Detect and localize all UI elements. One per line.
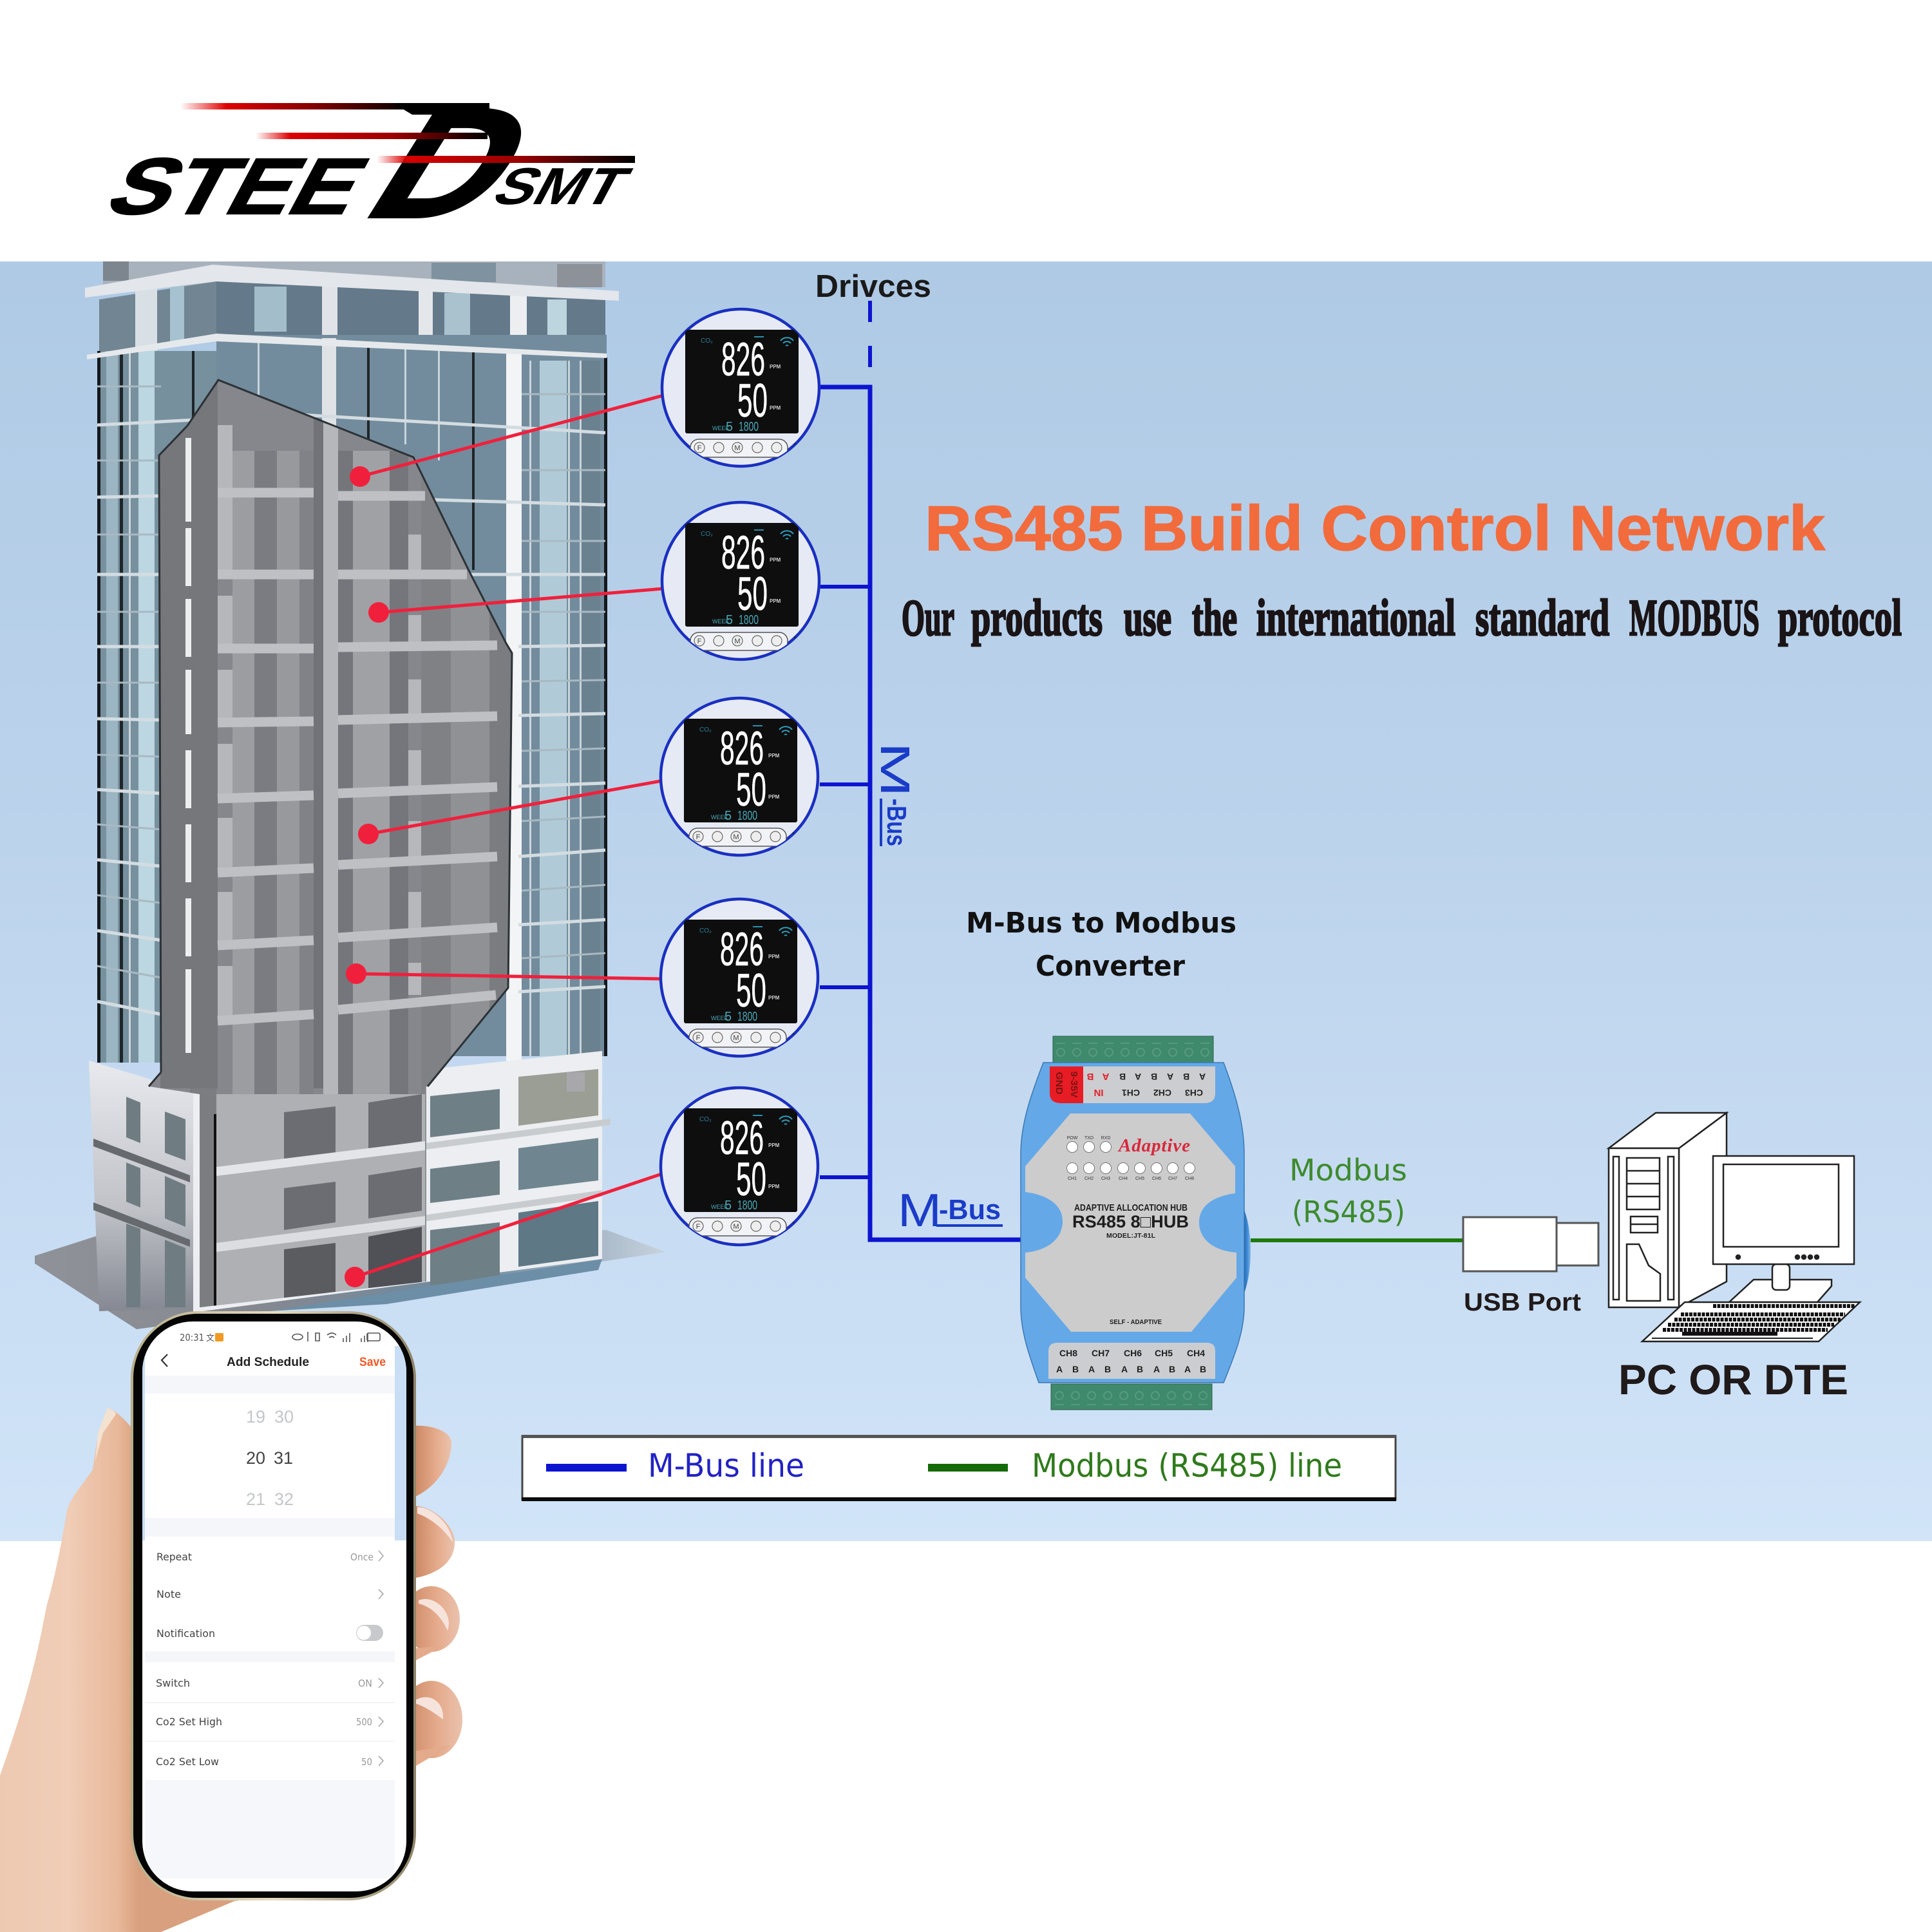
hub top label panel: IN [1094, 1087, 1104, 1098]
device 2: WEEK [712, 618, 730, 625]
hub top label panel: A [1167, 1072, 1173, 1082]
device 2: 1800 [739, 613, 759, 627]
phone settings rows: Switch [156, 1677, 190, 1689]
ground plate [35, 1230, 666, 1329]
penthouse glass floor [99, 281, 605, 355]
device 1: PPM [770, 364, 781, 370]
logo: STEED SMT: D [337, 76, 570, 251]
label: Modbus (RS485) [1289, 1153, 1407, 1229]
device 2 [662, 502, 819, 659]
hub product text: SELF - ADAPTIVE [1110, 1318, 1162, 1326]
hub top label panel: CH2 [1153, 1088, 1171, 1098]
logo: STEED SMT [93, 76, 639, 251]
hub bottom label panel: A [1088, 1364, 1095, 1374]
device 4: 826 [720, 923, 764, 976]
subtitle [902, 590, 1902, 647]
finger 4 [401, 1681, 462, 1758]
device 4: CO₂ [699, 927, 712, 934]
phone settings rows: ON [358, 1678, 372, 1689]
device 3: F [696, 833, 701, 841]
hub bottom label panel: CH4 [1187, 1348, 1205, 1358]
device 3: PPM [768, 753, 780, 759]
label: converter heading [966, 907, 1236, 983]
subtitle: Our [902, 590, 954, 647]
device 3: CO₂ [699, 726, 712, 734]
device 1: 50 [737, 375, 768, 427]
phone settings rows: Co2 Set High [156, 1716, 222, 1728]
hub LEDs [1066, 1141, 1195, 1173]
device 3: M [733, 833, 739, 841]
monitor [1713, 1156, 1854, 1264]
hub bottom label panel: CH6 [1124, 1348, 1142, 1358]
device 5: M [733, 1223, 739, 1231]
label: converter heading: M-Bus to Modbus [966, 907, 1236, 940]
phone time picker: 20 [246, 1448, 265, 1468]
Modbus green wire [1251, 1238, 1463, 1242]
device 5: WEEK [711, 1204, 728, 1210]
monitor stand [1729, 1264, 1832, 1302]
device 2: PPM [770, 557, 781, 563]
finger 1 [412, 1426, 451, 1498]
legend: M-Bus line [546, 1447, 804, 1484]
hub top label panel: B [1086, 1071, 1094, 1082]
hub bottom terminal [1051, 1384, 1212, 1410]
phone time picker: 32 [274, 1490, 294, 1509]
phone header: Add Schedule [227, 1356, 309, 1369]
hub top terminal [1053, 1036, 1213, 1063]
device 1: PPM [770, 405, 781, 411]
hub LED labels [1067, 1136, 1194, 1181]
hub top label panel: A [1135, 1072, 1141, 1082]
device 4: PPM [768, 995, 780, 1001]
phone settings rows: 50 [361, 1756, 372, 1768]
tower [1609, 1113, 1727, 1307]
phone time picker: 19 [246, 1407, 265, 1426]
hub product text [1072, 1202, 1189, 1326]
USB connector [1463, 1217, 1598, 1271]
device 1: WEEK [712, 425, 730, 431]
hub blue body [1021, 1063, 1244, 1383]
label: horizontal M-Bus: -Bus [939, 1194, 1001, 1226]
device 3: 5 [724, 809, 732, 823]
device 4: WEEK [711, 1015, 728, 1021]
device 4: F [696, 1034, 701, 1042]
hub LED labels: POW [1067, 1136, 1078, 1141]
hub bottom label panel: CH5 [1155, 1348, 1173, 1358]
device 2: F [697, 638, 702, 645]
phone toggle [356, 1625, 383, 1641]
subtitle: MODBUS [1629, 590, 1759, 647]
finger 2 [412, 1506, 455, 1578]
hub top label panel: 9-35V [1068, 1072, 1079, 1097]
rooftop block [103, 261, 605, 287]
hub bottom label panel: CH7 [1092, 1348, 1110, 1358]
label: horizontal M-Bus: M [898, 1185, 942, 1236]
label: vertical M-Bus: M [872, 742, 918, 797]
hub LED labels: RXD [1101, 1136, 1110, 1141]
device 1: 826 [721, 334, 765, 386]
phone [131, 1311, 416, 1900]
device 1: 1800 [739, 420, 759, 434]
phone status bar: 文 [206, 1333, 214, 1343]
device 3: 826 [720, 723, 764, 775]
hub top label panel: CH3 [1185, 1088, 1203, 1098]
device 3: 50 [736, 764, 766, 816]
hub bottom label panel: B [1169, 1364, 1175, 1374]
hub top label panel: A [1199, 1072, 1206, 1082]
finger 3 [403, 1586, 460, 1652]
hub LED labels: CH4 [1119, 1177, 1128, 1181]
hub product text: MODEL:JT-81L [1106, 1232, 1156, 1240]
hub LED labels: CH2 [1084, 1177, 1094, 1181]
building base [89, 1051, 611, 1312]
hub LED labels: CH8 [1185, 1177, 1194, 1181]
hub top label panel: A [1102, 1071, 1109, 1082]
thumb nail [95, 1408, 116, 1461]
hub top label panel: B [1119, 1072, 1126, 1082]
hub bottom label panel: A [1184, 1364, 1191, 1374]
hub LED labels: CH5 [1135, 1177, 1144, 1181]
device 3: WEEK [711, 814, 728, 820]
hub center panel [1025, 1113, 1236, 1332]
hub bottom label panel: B [1137, 1364, 1143, 1374]
background blue band [0, 261, 1932, 1541]
device 2: PPM [770, 598, 781, 604]
hub top label panel: B [1183, 1072, 1189, 1082]
device 4: 5 [724, 1010, 732, 1024]
device 5: 5 [724, 1198, 732, 1213]
logo: STEED SMT: SMT [484, 158, 639, 216]
device 5: PPM [768, 1142, 780, 1148]
device 1: 5 [726, 420, 733, 434]
phone settings rows: Repeat [156, 1551, 192, 1563]
device 3 [661, 698, 818, 855]
device 5: F [696, 1223, 701, 1231]
phone time picker: 21 [246, 1490, 265, 1509]
device 5: 1800 [737, 1198, 757, 1213]
phone status bar: 20:31 [180, 1332, 204, 1343]
phone settings rows: Co2 Set Low [156, 1756, 219, 1768]
label: Modbus (RS485): Modbus [1289, 1153, 1407, 1188]
hub top label panel: CH1 [1122, 1088, 1140, 1098]
hub top label panel [1050, 1066, 1215, 1103]
subtitle: standard [1475, 590, 1609, 647]
label: vertical M-Bus [872, 742, 918, 846]
phone settings rows [156, 1551, 383, 1768]
hub top label panel: GND [1054, 1072, 1065, 1095]
main glass facades [97, 335, 607, 1063]
legend: Modbus line: Modbus (RS485) line [1032, 1447, 1342, 1484]
legend [522, 1435, 1396, 1501]
keyboard [1642, 1302, 1860, 1341]
device 5: 50 [736, 1153, 766, 1206]
label: Modbus (RS485): (RS485) [1292, 1195, 1405, 1229]
sensor dots [345, 466, 389, 1287]
phone settings rows: Once [350, 1551, 374, 1563]
device 2: M [734, 638, 741, 645]
phone time picker: 30 [274, 1407, 294, 1426]
hub LED labels: CH1 [1068, 1177, 1077, 1181]
device 2: CO₂ [701, 531, 713, 538]
device 5: 826 [720, 1112, 764, 1164]
hub LED labels: CH7 [1168, 1177, 1177, 1181]
hub bottom label panel: B [1072, 1364, 1079, 1374]
device 4 [661, 899, 818, 1056]
device 2: 50 [737, 568, 768, 620]
device 5: CO₂ [699, 1116, 712, 1123]
device 5: PPM [768, 1184, 780, 1189]
label: converter heading: Converter [1036, 950, 1185, 983]
device 4: 1800 [737, 1010, 757, 1024]
hub product text: RS485 8□HUB [1072, 1212, 1189, 1231]
device 3: PPM [768, 794, 780, 800]
finger bases [412, 1645, 451, 1766]
hub bottom label panel: CH8 [1059, 1348, 1077, 1358]
phone settings rows: 500 [356, 1716, 372, 1728]
device 4: 50 [736, 965, 766, 1017]
palm and thumb [0, 1408, 270, 1932]
device 2: 826 [721, 527, 765, 579]
device 1 [662, 309, 819, 466]
hub bottom label panel: A [1056, 1364, 1063, 1374]
device 2: 5 [726, 613, 733, 627]
subtitle: international [1256, 590, 1455, 647]
hub bottom label panel: B [1104, 1364, 1111, 1374]
hub bulge [1243, 1207, 1251, 1296]
hub converter device [1021, 1036, 1251, 1410]
cutaway interior showing floors [148, 374, 515, 1314]
device 3: 1800 [737, 809, 757, 823]
white cornice bands [85, 265, 619, 359]
device 4: PPM [768, 954, 780, 960]
device 1: CO₂ [701, 337, 713, 345]
phone header: Save [359, 1356, 386, 1369]
device 1: M [734, 444, 741, 452]
device 1: F [697, 444, 702, 452]
subtitle: the [1192, 590, 1237, 647]
label: PC OR DTE: PC OR DTE [1618, 1356, 1848, 1403]
hub LED labels: CH6 [1152, 1177, 1161, 1181]
heading: Drivces: Drivces [815, 269, 931, 304]
hub LED labels: TXD [1084, 1136, 1094, 1141]
hub top label panel: B [1151, 1072, 1157, 1082]
label: USB Port: USB Port [1464, 1289, 1581, 1316]
hub bottom label panel: A [1153, 1364, 1160, 1374]
phone screen [142, 1332, 406, 1879]
legend: M-Bus line: M-Bus line [648, 1447, 804, 1484]
PC illustration [1609, 1113, 1860, 1341]
sensor pointer lines [355, 395, 663, 1277]
logo: STEED SMT: STEE [93, 142, 383, 231]
title: RS485 Build Control Network [925, 493, 1826, 564]
device 5 [661, 1088, 818, 1245]
hub Adaptive wordmark: Adaptive [1117, 1135, 1190, 1156]
phone settings rows: Notification [156, 1627, 215, 1640]
subtitle: use [1124, 590, 1171, 647]
phone header [162, 1354, 386, 1369]
subtitle: products [971, 590, 1103, 647]
hub bottom label panel: B [1200, 1364, 1206, 1374]
label: vertical M-Bus: -Bus [882, 799, 912, 846]
hub LED labels: CH3 [1101, 1177, 1110, 1181]
label: horizontal M-Bus [898, 1185, 1003, 1236]
hub bottom label panel [1048, 1343, 1215, 1379]
phone time picker [246, 1407, 294, 1509]
hub product text: ADAPTIVE ALLOCATION HUB [1074, 1202, 1188, 1213]
phone time picker: 31 [274, 1448, 293, 1468]
hand holding phone [0, 1408, 462, 1932]
device 4: M [733, 1034, 739, 1042]
phone status bar [180, 1332, 381, 1342]
phone settings rows: Note [156, 1588, 181, 1600]
building illustration [35, 261, 666, 1329]
bus wiring [820, 301, 1021, 1240]
hub bottom label panel: A [1121, 1364, 1128, 1374]
finger nails [415, 1507, 453, 1719]
